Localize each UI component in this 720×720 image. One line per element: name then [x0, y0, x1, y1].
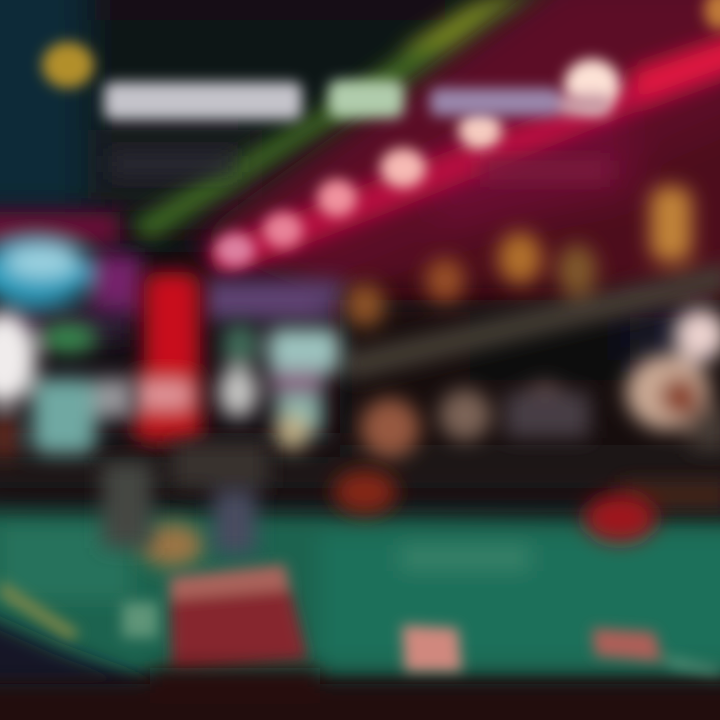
left white orb and teal figures — [0, 312, 133, 458]
panel: crimson wall — [190, 0, 720, 320]
table side rail — [0, 482, 720, 690]
dark foreground table edge — [0, 668, 720, 720]
playing cards — [122, 602, 720, 678]
right crowd faces — [360, 309, 720, 458]
panel: green gaming table — [0, 510, 720, 680]
panel: dark ceiling — [0, 0, 580, 240]
blurred sign lettering — [104, 80, 610, 120]
red chips on the table — [140, 470, 656, 567]
diagonal green and yellow light band — [130, 0, 550, 240]
table edge line — [0, 580, 80, 642]
panel: middle dark crowd background — [0, 300, 720, 500]
red card box — [170, 564, 308, 672]
centre pale figures — [218, 323, 340, 450]
panel: left blue and magenta screens — [0, 212, 345, 340]
diagonal pink red light stripe — [205, 25, 720, 278]
blurred faded sign lower text — [110, 155, 610, 180]
standing grey figures — [102, 442, 268, 554]
row of warm bottles — [340, 186, 720, 380]
ceiling lamps — [42, 0, 720, 267]
red tall column — [134, 272, 202, 442]
